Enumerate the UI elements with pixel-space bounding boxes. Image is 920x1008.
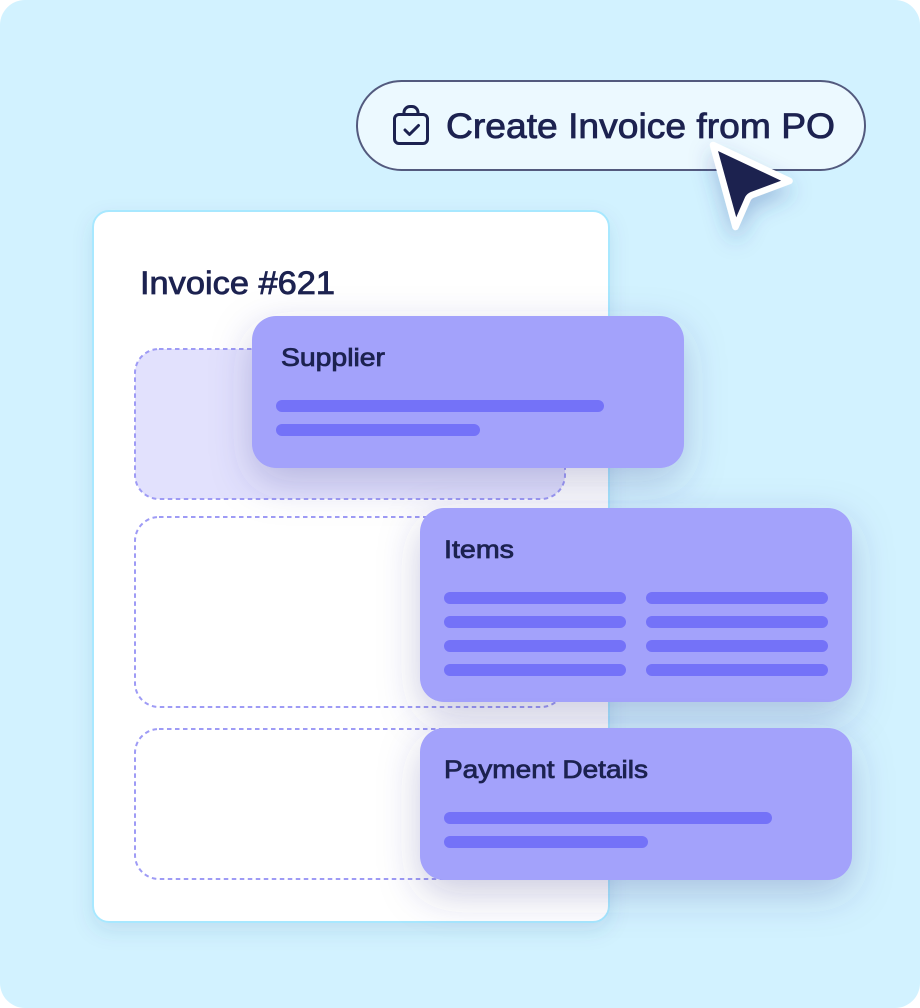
icon: cursor arrow bbox=[713, 145, 790, 227]
invoice document bbox=[93, 211, 609, 922]
payment heading: Payment Details bbox=[444, 756, 648, 784]
card: supplier bbox=[252, 316, 684, 468]
payment lines bbox=[444, 812, 772, 848]
invoice title: Invoice #621 bbox=[140, 265, 335, 301]
supplier placeholder slot bbox=[135, 349, 565, 499]
document sheet bbox=[93, 211, 609, 922]
items placeholder slot bbox=[135, 517, 565, 707]
supplier lines bbox=[276, 400, 604, 436]
card: items bbox=[420, 508, 852, 702]
supplier heading: Supplier bbox=[281, 344, 385, 372]
items lines bbox=[444, 592, 828, 676]
icon: shopping bag with check bbox=[394, 106, 428, 144]
items heading: Items bbox=[444, 536, 514, 564]
button label: Create Invoice from PO bbox=[446, 107, 835, 146]
button: create invoice from PO bbox=[357, 81, 865, 170]
card: payment details bbox=[420, 728, 852, 880]
payment placeholder slot bbox=[135, 729, 565, 879]
